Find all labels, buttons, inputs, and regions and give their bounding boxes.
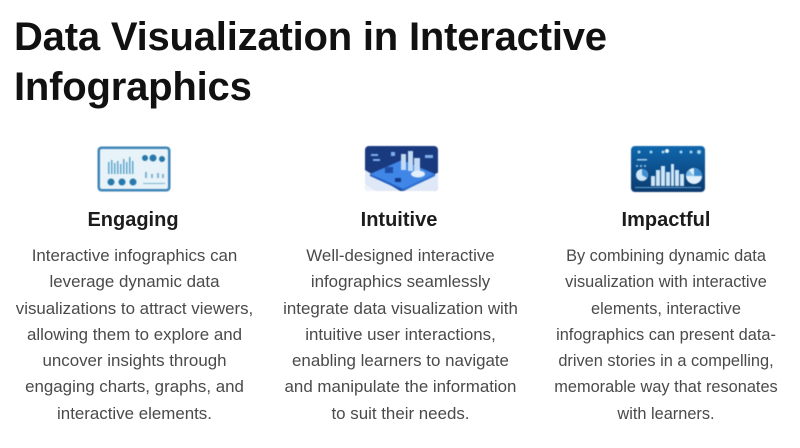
text: intuitive: enabling learners to navigate (292, 351, 509, 370)
text: engaging: visualizations to attract viewers, (16, 298, 253, 318)
text: intuitive: intuitive user interactions, (305, 325, 496, 344)
text: impactful (554, 247, 778, 422)
title: Infographics (14, 65, 252, 109)
icon: isometric data platform (364, 145, 439, 192)
heading: engaging: Engaging (87, 209, 179, 231)
text: impactful: visualization with interactive (565, 273, 767, 291)
text: impactful: with learners. (617, 404, 715, 422)
text: impactful: driven stories in a compelling, (558, 352, 774, 370)
panel: impactful (554, 145, 778, 422)
text: engaging: interactive elements. (57, 404, 212, 422)
text: intuitive: to suit their needs. (331, 404, 470, 422)
text: engaging: uncover insights through (42, 351, 227, 370)
heading: intuitive: Intuitive (361, 209, 437, 231)
text: engaging (16, 246, 253, 422)
text: engaging: engaging charts, graphs, and (25, 377, 244, 396)
text: impactful: By combining dynamic data (566, 247, 766, 265)
text: intuitive: Well-designed interactive (306, 246, 495, 265)
icon: city data dashboard (630, 145, 706, 193)
text: engaging: allowing them to explore and (27, 325, 242, 344)
panel: engaging (16, 146, 253, 422)
text: engaging: leverage dynamic data (50, 272, 219, 291)
icon: dashboard tablet (96, 146, 172, 192)
heading: impactful: Impactful (622, 209, 710, 231)
title: Data Visualization in Interactive (14, 15, 607, 59)
panel: intuitive (283, 145, 518, 422)
text: intuitive: and manipulate the information (285, 377, 516, 396)
text: engaging: Interactive infographics can (32, 246, 237, 265)
text: impactful: memorable way that resonates (554, 378, 778, 396)
text: intuitive (283, 246, 518, 422)
text: intuitive: infographics seamlessly (311, 272, 490, 291)
text: intuitive: integrate data visualization with (283, 298, 518, 318)
text: impactful: infographics can present data- (556, 326, 776, 344)
title (14, 15, 607, 109)
text: impactful: elements, interactive (591, 300, 741, 318)
